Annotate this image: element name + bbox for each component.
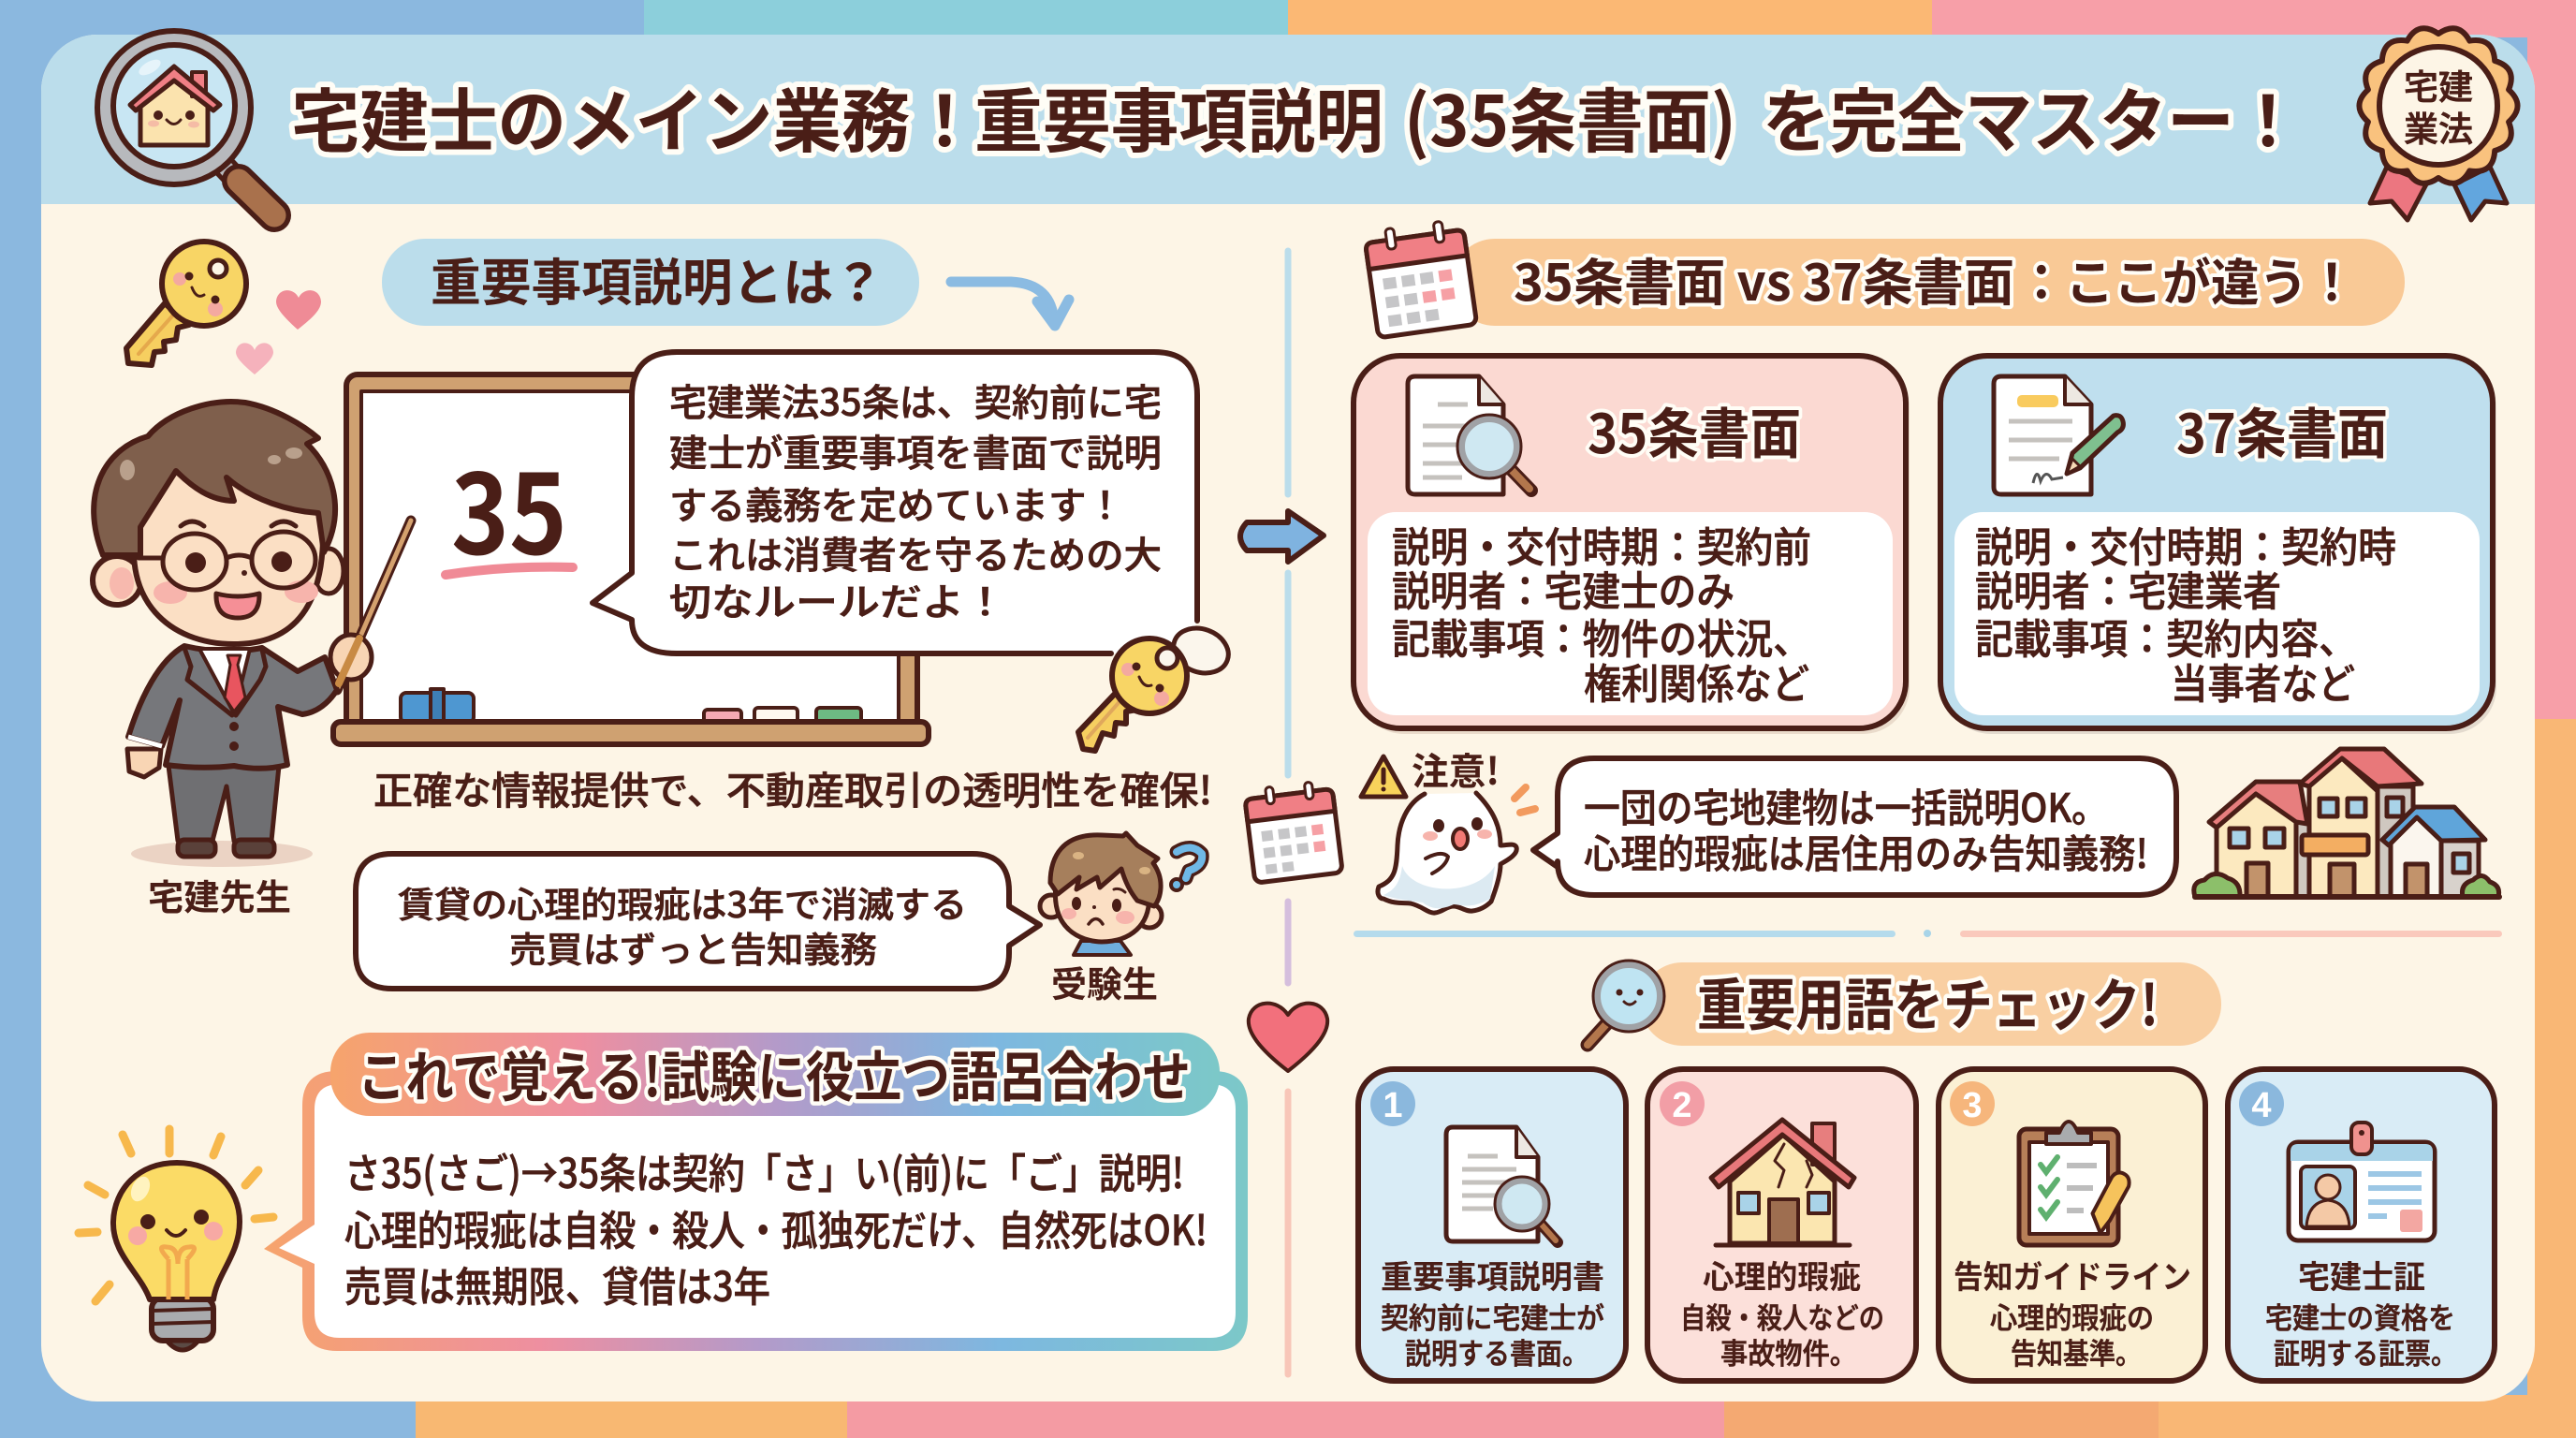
heading: 重要事項説明とは?: 重要事項説明とは？: [431, 242, 884, 315]
label: 宅建先生: 宅建先生: [148, 869, 291, 920]
term card 2: 心理的瑕疵: 事故物件。: [1720, 1330, 1857, 1372]
number badge 2: [1660, 1081, 1705, 1126]
note: transparency: 正確な情報提供で、不動産取引の透明性を確保!: [373, 759, 1212, 815]
label: 受験生: 受験生: [1051, 956, 1158, 1007]
number badge 1: 1: [1383, 1086, 1403, 1125]
speech bubble: explanation: [593, 352, 1197, 653]
teacher character: [93, 402, 411, 867]
icon: hearts: [236, 290, 321, 374]
icon: medal 宅建業法: 業法: [2404, 101, 2473, 152]
panel: 37条書面: 説明者：宅建業者: [1975, 558, 2281, 618]
hair: [94, 402, 335, 555]
label: 注意!: 注意!: [1412, 741, 1500, 796]
heading: 35条書面 vs 37条書面: [1452, 239, 2405, 326]
speech bubble: caution: 心理的瑕疵は居住用のみ告知義務!: [1584, 823, 2148, 880]
term card 1: 重要事項説明書: 契約前に宅建士が: [1381, 1295, 1604, 1337]
horizontal divider: [1354, 930, 2502, 937]
number badge 3: 3: [1962, 1086, 1983, 1125]
big number 35: 35: [451, 426, 567, 586]
icon: magnifier with house: [97, 31, 274, 215]
term card 3: 告知ガイドライン: [1939, 1069, 2205, 1381]
panel: mnemonic: [264, 1033, 1248, 1351]
panel: mnemonic: 心理的瑕疵は自殺・殺人・孤独死だけ、自然死はOK!: [344, 1197, 1208, 1257]
panel: 35条書面: 説明者：宅建士のみ: [1392, 558, 1734, 618]
icon: document with pen: [1994, 376, 2123, 494]
speech bubble: student question: 売買はずっと告知義務: [509, 921, 877, 973]
arrow: to comparison: [1240, 511, 1324, 562]
icon: cracked house: [1711, 1120, 1854, 1245]
panel: 35条書面: [1354, 356, 1910, 734]
left hand: [127, 749, 161, 777]
number badge 4: 4: [2251, 1086, 2272, 1125]
card title: 37条書面: [2176, 390, 2388, 469]
icon: heart: [1249, 1004, 1327, 1071]
whiteboard: [333, 374, 929, 744]
trousers: [168, 766, 279, 841]
panel: mnemonic: これで覚える!試験に役立つ語呂合わせ: [358, 1034, 1191, 1112]
underline: [446, 567, 573, 575]
heading: 35条書面 vs 37条書面: 35条書面 vs 37条書面: [1514, 242, 2014, 315]
icon: key with ring: [1078, 621, 1235, 751]
mnemonic heading: [330, 1033, 1220, 1116]
term card 4: 宅建士証: 宅建士証: [2298, 1252, 2425, 1298]
panel: 37条書面: [1940, 356, 2496, 734]
number badge 4: [2239, 1081, 2284, 1126]
icon: calendar mid: [1244, 780, 1342, 883]
term card 4: 宅建士証: 宅建士の資格を: [2265, 1295, 2455, 1337]
glasses, eyes: [185, 552, 206, 573]
term card 1: 重要事項説明書: 重要事項説明書: [1381, 1252, 1604, 1298]
right hand: [330, 635, 372, 680]
panel: 35条書面: 権利関係など: [1584, 651, 1809, 711]
number badge 1: [1370, 1081, 1415, 1126]
term card 3: 告知ガイドライン: 告知ガイドライン: [1954, 1252, 2191, 1298]
icon: document with magnifier: [1408, 376, 1531, 494]
speech bubble: explanation: 宅建業法35条は、契約前に宅: [669, 373, 1162, 427]
icon: document search: [1446, 1127, 1558, 1242]
speech bubble: caution: [1533, 758, 2176, 895]
pointer stick: [337, 521, 411, 690]
speech bubble: student question: 賃貸の心理的瑕疵は3年で消滅する: [398, 876, 967, 928]
heading: 35条書面 vs 37条書面: ：ここが違う！: [2017, 242, 2356, 315]
card title: 35条書面: [1588, 390, 1801, 469]
arrow: curved: [951, 282, 1069, 326]
eraser and markers: [401, 689, 861, 723]
term card 2: 心理的瑕疵: [1647, 1069, 1916, 1381]
icon: medal 宅建業法: 宅建: [2404, 59, 2473, 110]
panel: 37条書面: 記載事項：契約内容、: [1975, 606, 2357, 666]
title: 重要事項説明: [974, 66, 1383, 167]
vertical divider segments: [1284, 251, 1292, 1374]
icon: question mark: [1171, 847, 1202, 890]
header band: [41, 35, 2535, 204]
icon: houses: [2194, 749, 2499, 897]
student character: [1040, 833, 1162, 955]
term card 3: 告知ガイドライン: 心理的瑕疵の: [1990, 1295, 2154, 1337]
title: [291, 66, 2302, 167]
term card 1: 重要事項説明書: [1358, 1069, 1626, 1381]
term card 4: 宅建士証: 証明する証票。: [2274, 1330, 2457, 1372]
icon: clipboard: [2019, 1122, 2145, 1245]
icon: light bulb: [79, 1129, 273, 1350]
panel: mnemonic: 売買は無期限、貸借は3年: [344, 1254, 770, 1313]
term card 3: 告知ガイドライン: 告知基準。: [2011, 1330, 2142, 1372]
panel: 37条書面: 当事者など: [2171, 651, 2355, 711]
panel: 35条書面: 記載事項：物件の状況、: [1392, 606, 1811, 666]
card lines: 説明・交付時期：契約時: [1975, 514, 2396, 574]
term card 4: 宅建士証: [2228, 1069, 2495, 1381]
term card 2: 心理的瑕疵: 心理的瑕疵: [1703, 1252, 1861, 1298]
speech bubble: caution: 一団の宅地建物は一括説明OK。: [1584, 777, 2108, 834]
speech bubble: explanation: 切なルールだよ！: [669, 572, 1006, 626]
speech bubble: explanation: これは消費者を守るための大: [669, 525, 1162, 580]
ghost character: [1378, 787, 1535, 913]
mnemonic text: さ35(さご)→35条は契約「さ」い(前)に「ご」説明!: [344, 1140, 1184, 1200]
speech bubble: student question: [356, 854, 1040, 989]
caution: warning sign: [1361, 756, 1406, 797]
icon: ID card: [2289, 1123, 2435, 1240]
number badge 2: 2: [1672, 1086, 1692, 1125]
number badge 3: [1950, 1081, 1995, 1126]
speech bubble: explanation: する義務を定めています！: [669, 476, 1124, 530]
term card 1: 重要事項説明書: 説明する書面。: [1405, 1330, 1588, 1372]
speech bubble: explanation: 建士が重要事項を書面で説明: [669, 423, 1162, 477]
title: 宅建士のメイン業務！: [291, 66, 979, 167]
icon: medal 宅建業法: [2359, 28, 2518, 220]
icon: calendar heading: [1364, 218, 1477, 338]
title: を完全マスター！: [1763, 66, 2302, 167]
title: (35条書面): [1404, 66, 1736, 167]
icon: smiling key: [126, 242, 246, 365]
icon: magnifier mascot: [1588, 961, 1664, 1045]
term card 2: 心理的瑕疵: 自殺・殺人などの: [1680, 1295, 1884, 1337]
card lines: 説明・交付時期：契約前: [1392, 514, 1811, 574]
head: [93, 556, 141, 605]
heading: 重要用語をチェック!: 重要用語をチェック!: [1697, 961, 2159, 1042]
jacket: [128, 646, 337, 769]
